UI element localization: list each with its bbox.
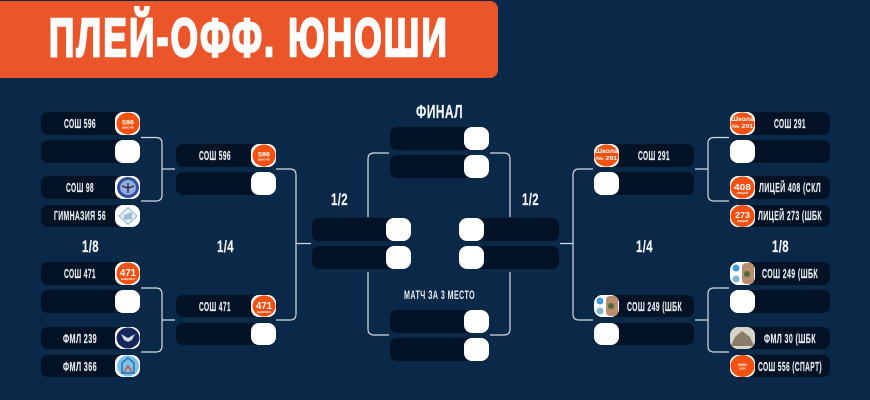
team: СОШ 596: 596 [258,152,271,158]
team: СОШ 291: № 291 [596,156,617,162]
team: СОШ 596: 596 [122,120,135,126]
final slot 2 [390,155,489,178]
label: left 1/2: 1/2 [331,190,348,209]
team: СОШ 471: СОШ 471 [64,266,96,281]
team: СОШ 98 [41,176,140,199]
label: third place match: МАТЧ ЗА 3 МЕСТО [404,290,475,302]
bracket connectors [141,138,729,352]
right semifinal slot 1 [459,218,559,241]
panel: left round of 8 [41,112,140,377]
title banner [0,1,498,78]
panel: center matches [312,127,559,361]
team: СОШ 291 [730,112,830,135]
team: ФМЛ 366: ФМЛ 366 [63,359,97,374]
team: ФМЛ 366 [41,355,140,377]
team: СОШ 291: № 291 [732,124,753,130]
label: left 1/4: 1/4 [217,237,234,256]
left semifinal slot 1 [312,218,411,241]
final slot 1 [390,127,489,150]
third place slot 2 [390,338,489,361]
label: left 1/8: 1/8 [82,237,99,256]
label: right 1/2: 1/2 [522,190,539,209]
empty slot [41,290,140,313]
team: СОШ 596 [41,112,140,135]
left semifinal slot 2 [312,246,411,269]
team: СОШ 556 (СПАРТ): ШКОЛА [739,366,746,370]
team: СОШ 291 [594,144,694,167]
title: ПЛЕЙ-ОФФ. ЮНОШИ [49,7,449,68]
team: ЛИЦЕЙ 273 (ШБК: ЛИЦЕЙ [737,219,748,223]
empty slot [176,172,276,195]
panel: left quarterfinals [176,144,276,345]
team: ГИМНАЗИЯ 56: ГИМНАЗИЯ 56 [54,208,106,223]
team: ФМЛ 30 (ШБК: ФМЛ 30 (ШБК [764,331,816,346]
team: ФМЛ 239 [41,327,140,349]
empty slot [730,140,830,163]
label: right 1/8: 1/8 [772,237,789,256]
panel: right quarterfinals [594,144,694,345]
empty slot [176,323,276,345]
team: СОШ 249 (ШБК [594,295,694,317]
team: ЛИЦЕЙ 273 (ШБК: 273 [735,211,751,220]
team: СОШ 596: СОШ 596 [199,148,231,163]
team: СОШ 249 (ШБК: СОШ 249 (ШБК [627,299,682,314]
empty slot [594,323,694,345]
team: СОШ 471: ШКОЛА [257,310,271,314]
team: СОШ 471: СОШ 471 [199,299,231,314]
team: СОШ 291: СОШ 291 [774,116,806,131]
third place slot 1 [390,310,489,333]
team: СОШ 291: Школа [595,149,619,155]
team: ЛИЦЕЙ 408 (СКЛ [730,176,830,199]
team: СОШ 596: ШКОЛА [122,126,134,130]
team: СОШ 471: 471 [256,301,272,312]
right semifinal slot 2 [459,246,559,269]
team: СОШ 556 (СПАРТ): 556 [738,362,748,367]
team: СОШ 249 (ШБК [730,262,830,285]
team: СОШ 471: ШКОЛА [121,277,135,281]
team: СОШ 596: СОШ 596 [64,116,96,131]
team: СОШ 556 (СПАРТ) [730,355,830,377]
empty slot [730,290,830,313]
label: final: ФИНАЛ [416,102,463,122]
team: ФМЛ 239: ФМЛ 239 [63,331,97,346]
empty slot [41,140,140,163]
team: СОШ 471: 471 [120,268,136,279]
team: СОШ 249 (ШБК: СОШ 249 (ШБК [762,266,818,281]
team: ЛИЦЕЙ 408 (СКЛ: ЛИЦЕЙ [737,191,748,195]
team: СОШ 291: Школа [731,117,755,123]
team: ЛИЦЕЙ 273 (ШБК [730,205,830,227]
label: right 1/4: 1/4 [636,237,653,256]
team: ФМЛ 30 (ШБК [730,327,830,349]
team: ЛИЦЕЙ 408 (СКЛ: 408 [734,183,752,192]
team: СОШ 596: ШКОЛА [258,158,270,162]
team: ГИМНАЗИЯ 56 [41,205,140,227]
team: СОШ 471 [41,262,140,285]
round labels [82,102,789,302]
panel: right round of 8 [730,112,830,377]
team: СОШ 596 [176,144,276,167]
team: СОШ 98: СОШ 98 [66,180,94,195]
team: СОШ 291: СОШ 291 [638,148,670,163]
empty slot [594,172,694,195]
team: СОШ 471 [176,295,276,317]
